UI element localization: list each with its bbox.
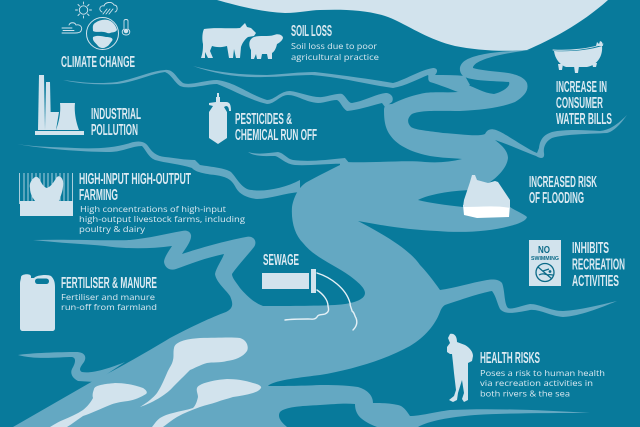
text block: fertiliser: run-off from farmland (61, 302, 157, 313)
tributary: industrial (17, 142, 300, 199)
text block: pesticides: PESTICIDES & (235, 111, 292, 128)
text block: health risks: Poses a risk to human health (480, 368, 605, 379)
text block: high-input farming: high-output livestock farms, including (79, 214, 245, 225)
text block: fertiliser: FERTILISER & MANURE (61, 275, 157, 292)
text block: industrial pollution (91, 106, 141, 139)
tributary: top (63, 70, 393, 111)
heading: sewage: SEWAGE (263, 252, 299, 269)
icon: sheep (249, 34, 283, 59)
text block: industrial pollution: INDUSTRIAL (91, 106, 141, 123)
plume 2 (50, 383, 147, 427)
text block: fertiliser: Fertiliser and manure (61, 292, 155, 303)
icon: cow (201, 23, 256, 58)
plume 3 (152, 379, 261, 427)
icon: windy cloud (62, 23, 82, 33)
text block: flooding (529, 174, 597, 207)
text block: flooding: OF FLOODING (529, 190, 584, 207)
heading: climate change: CLIMATE CHANGE (61, 54, 135, 71)
text block: recreation: INHIBITS (572, 240, 609, 257)
text block: water bills (556, 79, 612, 128)
text block: high-input farming: FARMING (79, 187, 118, 204)
text block: soil loss: agricultural practice (291, 52, 379, 63)
icon: climate change globe and weather (62, 2, 130, 50)
panel: estuary sediment plumes (50, 338, 261, 427)
text block: health risks (480, 350, 605, 400)
text block: recreation (572, 240, 625, 290)
icon: industrial factory (35, 75, 84, 135)
icon: thermometer (122, 20, 130, 35)
text block: high-input farming: poultry & dairy (79, 224, 146, 235)
text block: industrial pollution: POLLUTION (91, 122, 138, 139)
tributary: lower left (18, 352, 125, 382)
text block: soil loss: SOIL LOSS (291, 23, 332, 40)
text block: fertiliser (61, 275, 157, 313)
text block: soil loss (291, 23, 379, 63)
text block: high-input farming: High concentrations of high-input (80, 204, 226, 215)
text block: pesticides (235, 111, 317, 144)
icon: bathtub (553, 41, 603, 73)
tributary: soil loss (193, 66, 470, 92)
icon: no swimming sign: NO (538, 245, 550, 256)
icon: globe (86, 18, 118, 50)
icon: rain cloud (100, 2, 117, 14)
text block: health risks: via recreation activities in (480, 378, 593, 389)
text block: health risks: both rivers & the sea (480, 388, 570, 400)
text block: pesticides: CHEMICAL RUN OFF (235, 127, 317, 144)
icon: sewage pipe (262, 269, 357, 330)
icon: no swimming sign: SWIMMING (531, 256, 559, 262)
text block: high-input farming: HIGH-INPUT HIGH-OUTPUT (79, 171, 191, 188)
text block: high-input farming (79, 171, 245, 235)
icon: caged chicken (20, 173, 73, 216)
icon: sun (76, 2, 92, 18)
icon: flooded house (463, 175, 510, 218)
tributary: pesticides (248, 152, 350, 165)
plume 1 (140, 338, 248, 407)
icon: spray bottle (209, 93, 231, 144)
panel: sea at top (217, 0, 608, 51)
icon: fertiliser jug (20, 274, 55, 331)
text block: health risks: HEALTH RISKS (480, 350, 540, 367)
icon: no swimming sign (529, 240, 561, 286)
text block: soil loss: Soil loss due to poor (291, 41, 378, 52)
icon: sick person (447, 334, 473, 402)
